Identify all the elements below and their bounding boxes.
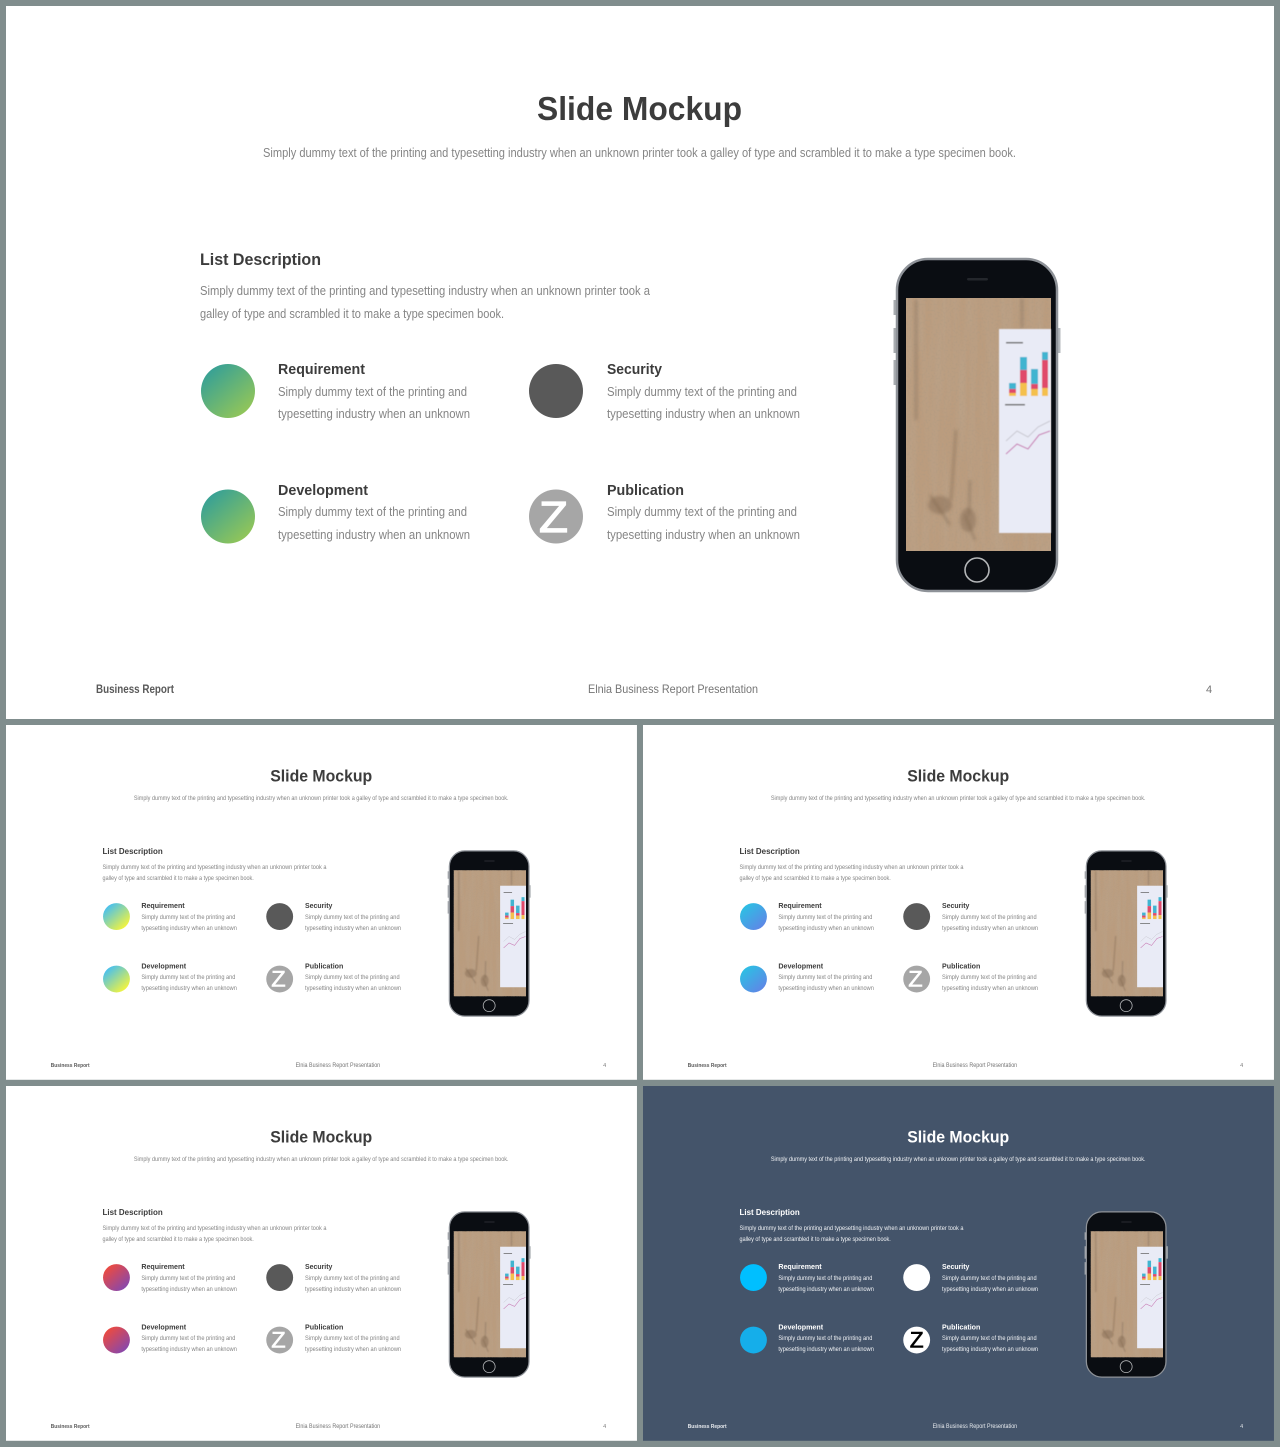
icon: development circle [103, 1327, 130, 1353]
item: security: Simply dummy text of the printing and [305, 1275, 400, 1282]
list description text [740, 864, 964, 882]
title: Slide Mockup [537, 90, 742, 127]
list description heading: List Description [103, 1207, 163, 1217]
item: security: Simply dummy text of the printing and [942, 914, 1037, 921]
footer: 4 [603, 1424, 606, 1430]
icon: security circle [903, 1264, 930, 1291]
title: Slide Mockup [270, 1129, 372, 1147]
subtitle: Simply dummy text of the printing and typesetting industry when an unknown printer took a galley of type and scrambled it to make a type specimen book. [263, 146, 1016, 160]
icon: publication Z circle: Z [271, 1328, 286, 1353]
icon: publication Z circle: Z [908, 967, 923, 992]
item: publication: typesetting industry when an unknown [942, 1346, 1039, 1353]
item: development: Simply dummy text of the printing and [141, 1335, 236, 1342]
item: requirement [278, 362, 470, 421]
icon: development circle [740, 1327, 767, 1353]
list description text: galley of type and scrambled it to make a type specimen book. [740, 1236, 891, 1243]
item: publication: Publication [607, 483, 684, 499]
title: Slide Mockup [907, 768, 1009, 786]
item: security: Security [942, 901, 969, 910]
footer: Elnia Business Report Presentation [296, 1424, 380, 1430]
icon: requirement circle [103, 1264, 130, 1291]
panel: dark slide [643, 1086, 1274, 1441]
subtitle: Simply dummy text of the printing and typesetting industry when an unknown printer took a galley of type and scrambled it to make a type specimen book. [134, 1156, 509, 1163]
panel: yellow-blue slide [6, 725, 637, 1080]
list description text: Simply dummy text of the printing and typesetting industry when an unknown printer took a [740, 1225, 964, 1232]
item: development: typesetting industry when an unknown [141, 985, 237, 992]
footer [688, 1063, 1243, 1069]
list description text [103, 1225, 327, 1243]
item: requirement: Requirement [141, 901, 185, 910]
item: requirement: typesetting industry when an unknown [278, 407, 470, 421]
list description text: galley of type and scrambled it to make a type specimen book. [200, 307, 504, 321]
icon: development circle [201, 490, 255, 544]
list description text: Simply dummy text of the printing and typesetting industry when an unknown printer took a [200, 284, 650, 298]
item: requirement [141, 901, 237, 932]
phone mockup [1085, 1212, 1168, 1377]
icon: requirement circle [201, 364, 255, 418]
item: security: Security [942, 1262, 969, 1271]
icon: requirement circle [103, 903, 130, 930]
list description heading: List Description [740, 1207, 800, 1217]
footer [96, 682, 1212, 696]
item: security [305, 1262, 402, 1293]
item: security: Simply dummy text of the printing and [305, 914, 400, 921]
icon: security circle [529, 364, 583, 418]
item: publication [305, 1322, 402, 1353]
phone mockup [448, 1212, 531, 1377]
item: publication: Simply dummy text of the printing and [305, 974, 400, 981]
list description text: galley of type and scrambled it to make a type specimen book. [103, 1236, 254, 1243]
item: development: typesetting industry when an unknown [778, 985, 874, 992]
item: requirement: Requirement [278, 362, 365, 378]
item: requirement: typesetting industry when an unknown [778, 1286, 874, 1293]
item: security: Security [607, 362, 662, 378]
item: publication: Publication [305, 961, 343, 970]
item: requirement: Simply dummy text of the printing and [278, 385, 467, 399]
item: publication: Simply dummy text of the printing and [942, 974, 1037, 981]
item: development [778, 1322, 874, 1353]
icon: requirement circle [740, 903, 767, 930]
footer: Elnia Business Report Presentation [933, 1063, 1017, 1069]
subtitle: Simply dummy text of the printing and typesetting industry when an unknown printer took a galley of type and scrambled it to make a type specimen book. [134, 795, 509, 802]
item: requirement: Requirement [778, 1262, 822, 1271]
item: requirement [141, 1262, 237, 1293]
panel: blue slide [643, 725, 1274, 1080]
icon: security circle [903, 903, 930, 930]
footer [688, 1424, 1243, 1430]
list description heading: List Description [103, 846, 163, 856]
icon: publication Z circle [266, 1327, 293, 1353]
item: development: Development [778, 961, 824, 970]
item: development: Simply dummy text of the printing and [141, 974, 236, 981]
subtitle: Simply dummy text of the printing and typesetting industry when an unknown printer took a galley of type and scrambled it to make a type specimen book. [771, 1156, 1146, 1163]
list description text: Simply dummy text of the printing and typesetting industry when an unknown printer took a [103, 864, 327, 871]
item: requirement: Simply dummy text of the printing and [778, 914, 873, 921]
list description heading: List Description [740, 846, 800, 856]
icon: publication Z circle [903, 966, 930, 992]
item: publication: Simply dummy text of the printing and [607, 505, 797, 519]
footer: Business Report [688, 1063, 727, 1069]
subtitle: Simply dummy text of the printing and typesetting industry when an unknown printer took a galley of type and scrambled it to make a type specimen book. [771, 795, 1146, 802]
list description text [740, 1225, 964, 1243]
item: security: typesetting industry when an unknown [305, 925, 402, 932]
item: security: Security [305, 901, 332, 910]
item: development: typesetting industry when an unknown [778, 1346, 874, 1353]
item: requirement: Requirement [778, 901, 822, 910]
icon: publication Z circle: Z [271, 967, 286, 992]
footer: 4 [603, 1063, 606, 1069]
list description heading: List Description [200, 250, 321, 269]
icon: development circle [740, 966, 767, 992]
item: development: Development [778, 1322, 824, 1331]
item: publication: typesetting industry when an unknown [942, 985, 1039, 992]
item: development: Development [141, 1322, 187, 1331]
item: development: Simply dummy text of the printing and [278, 505, 467, 519]
item: development [141, 961, 237, 992]
panel: large green slide [6, 6, 1274, 719]
item: publication [305, 961, 402, 992]
item: security: typesetting industry when an unknown [942, 1286, 1039, 1293]
item: security: Simply dummy text of the printing and [942, 1275, 1037, 1282]
icon: security circle [266, 1264, 293, 1291]
title: Slide Mockup [907, 1129, 1009, 1147]
footer: 4 [1240, 1063, 1243, 1069]
item: publication: Simply dummy text of the printing and [305, 1335, 400, 1342]
item: security [305, 901, 402, 932]
panel: red slide [6, 1086, 637, 1441]
list description text: galley of type and scrambled it to make a type specimen book. [103, 875, 254, 882]
icon: publication Z circle [903, 1327, 930, 1353]
item: security: typesetting industry when an unknown [607, 407, 800, 421]
footer: Elnia Business Report Presentation [296, 1063, 380, 1069]
item: development [778, 961, 874, 992]
item: publication: typesetting industry when an unknown [305, 1346, 402, 1353]
icon: development circle [103, 966, 130, 992]
title: Slide Mockup [270, 768, 372, 786]
footer [51, 1424, 606, 1430]
item: security: typesetting industry when an unknown [942, 925, 1039, 932]
icon: requirement circle [740, 1264, 767, 1291]
item: development: Development [141, 961, 187, 970]
list description text: Simply dummy text of the printing and typesetting industry when an unknown printer took a [740, 864, 964, 871]
item: development: typesetting industry when an unknown [141, 1346, 237, 1353]
item: development: typesetting industry when an unknown [278, 528, 470, 542]
item: development [278, 483, 470, 542]
list description text: Simply dummy text of the printing and typesetting industry when an unknown printer took a [103, 1225, 327, 1232]
item: development [141, 1322, 237, 1353]
item: requirement: Simply dummy text of the printing and [778, 1275, 873, 1282]
item: requirement: typesetting industry when an unknown [778, 925, 874, 932]
item: security [942, 901, 1039, 932]
footer: Business Report [51, 1063, 90, 1069]
item: security: Simply dummy text of the printing and [607, 385, 797, 399]
list description text [200, 284, 650, 321]
list description text [103, 864, 327, 882]
item: requirement: Simply dummy text of the printing and [141, 914, 236, 921]
item: publication: Publication [942, 961, 980, 970]
footer: Elnia Business Report Presentation [933, 1424, 1017, 1430]
footer: 4 [1206, 684, 1212, 696]
footer [51, 1063, 606, 1069]
item: security [607, 362, 800, 421]
item: requirement [778, 1262, 874, 1293]
icon: security circle [266, 903, 293, 930]
footer: 4 [1240, 1424, 1243, 1430]
item: requirement: typesetting industry when an unknown [141, 1286, 237, 1293]
icon: publication Z circle: Z [539, 493, 568, 542]
item: publication [942, 961, 1039, 992]
item: requirement: Requirement [141, 1262, 185, 1271]
item: requirement: Simply dummy text of the printing and [141, 1275, 236, 1282]
item: publication: Publication [305, 1322, 343, 1331]
icon: publication Z circle [266, 966, 293, 992]
item: security: typesetting industry when an unknown [305, 1286, 402, 1293]
item: publication: Publication [942, 1322, 980, 1331]
item: requirement: typesetting industry when an unknown [141, 925, 237, 932]
phone mockup [1085, 851, 1168, 1016]
item: security [942, 1262, 1039, 1293]
list description text: galley of type and scrambled it to make a type specimen book. [740, 875, 891, 882]
item: publication: typesetting industry when an unknown [607, 528, 800, 542]
item: publication: Simply dummy text of the printing and [942, 1335, 1037, 1342]
item: publication [942, 1322, 1039, 1353]
item: publication [607, 483, 800, 542]
footer: Elnia Business Report Presentation [588, 682, 758, 696]
icon: publication Z circle [529, 490, 583, 544]
icon: publication Z circle: Z [910, 1328, 924, 1353]
item: development: Simply dummy text of the printing and [778, 1335, 873, 1342]
item: requirement [778, 901, 874, 932]
item: development: Simply dummy text of the printing and [778, 974, 873, 981]
item: publication: typesetting industry when an unknown [305, 985, 402, 992]
item: development: Development [278, 483, 368, 499]
phone mockup [448, 851, 531, 1016]
item: security: Security [305, 1262, 332, 1271]
phone mockup [894, 259, 1060, 591]
footer: Business Report [51, 1424, 90, 1430]
footer: Business Report [688, 1424, 727, 1430]
footer: Business Report [96, 684, 174, 696]
